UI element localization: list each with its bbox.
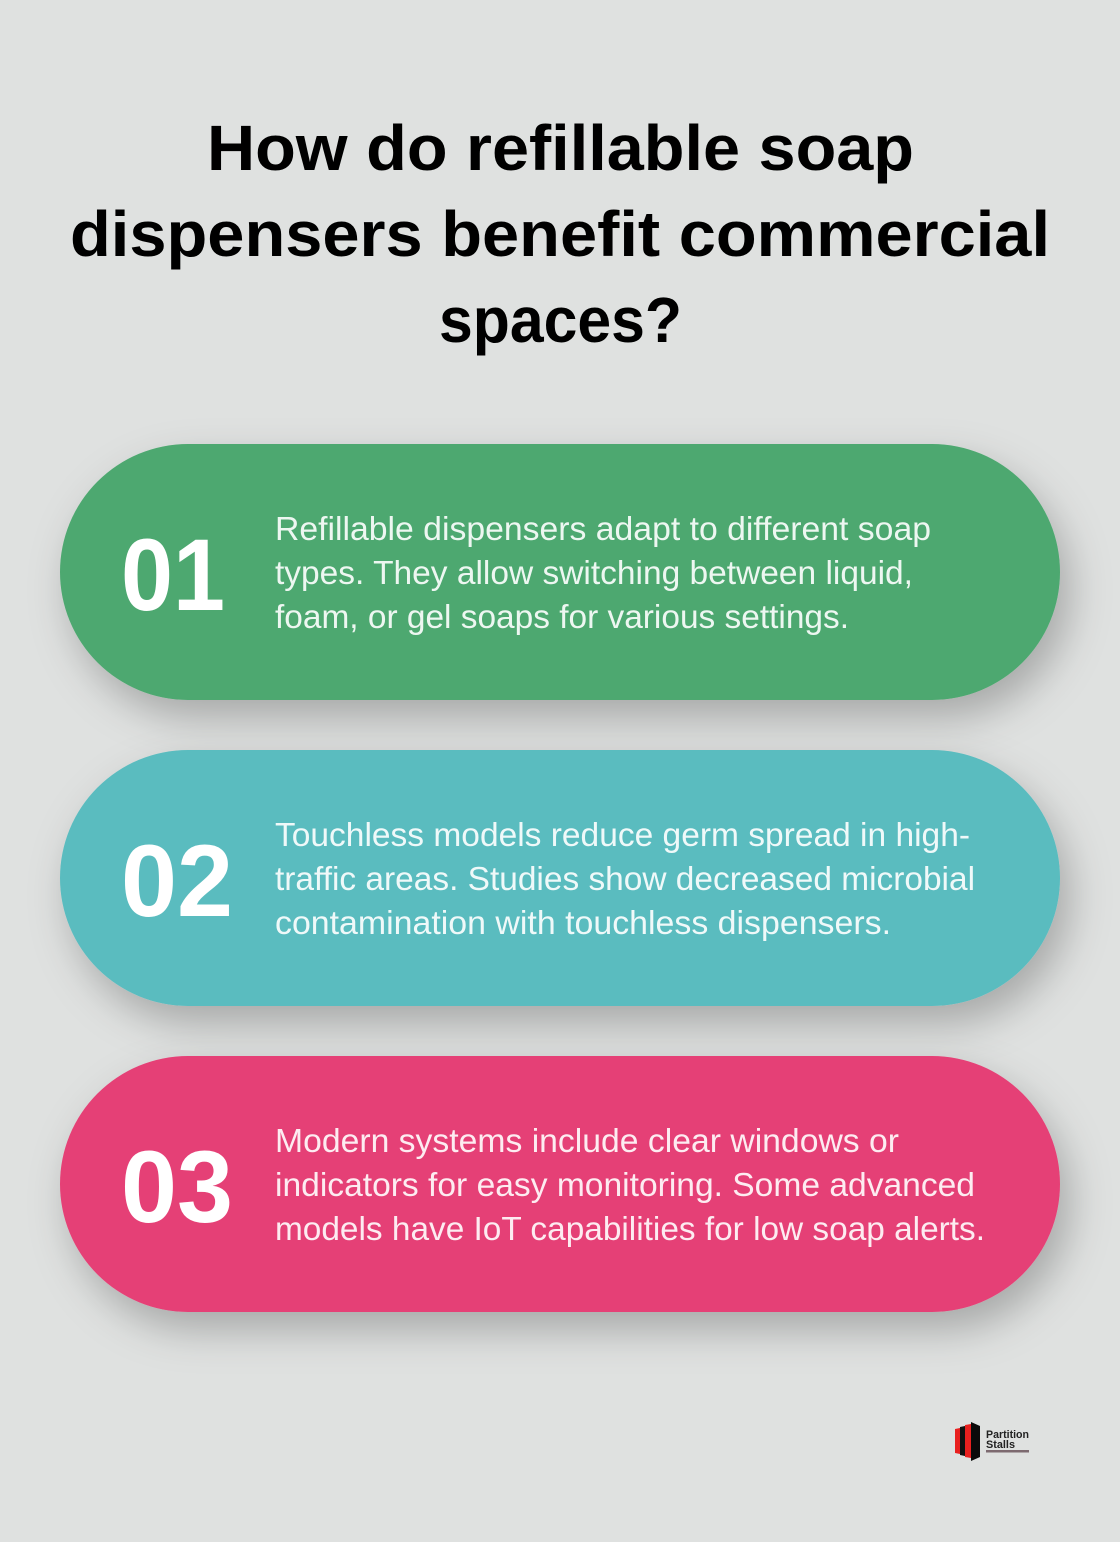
card 02 number: 02 <box>121 824 233 938</box>
card 01 number: 01 <box>121 518 225 632</box>
card 02 text: contamination with touchless dispensers. <box>275 904 891 941</box>
card 01 background <box>60 444 1060 700</box>
card 03 text: Modern systems include clear windows or <box>275 1122 899 1159</box>
title: spaces? <box>439 284 682 356</box>
logo wordmark: Partition <box>986 1429 1029 1441</box>
card 03 text <box>275 1122 985 1247</box>
card 01 text <box>275 510 931 635</box>
title: How do refillable soap <box>207 112 914 184</box>
logo wordmark <box>986 1429 1029 1452</box>
card 02 text <box>275 816 975 941</box>
card 03 background <box>60 1056 1060 1312</box>
title: dispensers benefit commercial <box>70 198 1050 270</box>
card 01 text: foam, or gel soaps for various settings. <box>275 598 849 635</box>
panel: card 02 <box>60 750 1060 1006</box>
card 03 text: models have IoT capabilities for low soap alerts. <box>275 1210 985 1247</box>
logo: Partition Stalls <box>955 1422 1029 1461</box>
icon: partition bars <box>955 1422 980 1461</box>
card 03 number: 03 <box>121 1130 233 1244</box>
card 02 text: Touchless models reduce germ spread in high- <box>275 816 970 853</box>
panel: card 01 <box>60 444 1060 700</box>
logo wordmark: Stalls <box>986 1439 1015 1451</box>
card 02 background <box>60 750 1060 1006</box>
title <box>70 112 1050 356</box>
card 03 text: indicators for easy monitoring. Some advanced <box>275 1166 975 1203</box>
card 01 text: Refillable dispensers adapt to different soap <box>275 510 931 547</box>
card 01 text: types. They allow switching between liquid, <box>275 554 913 591</box>
panel: card 03 <box>60 1056 1060 1312</box>
card 02 text: traffic areas. Studies show decreased microbial <box>275 860 975 897</box>
